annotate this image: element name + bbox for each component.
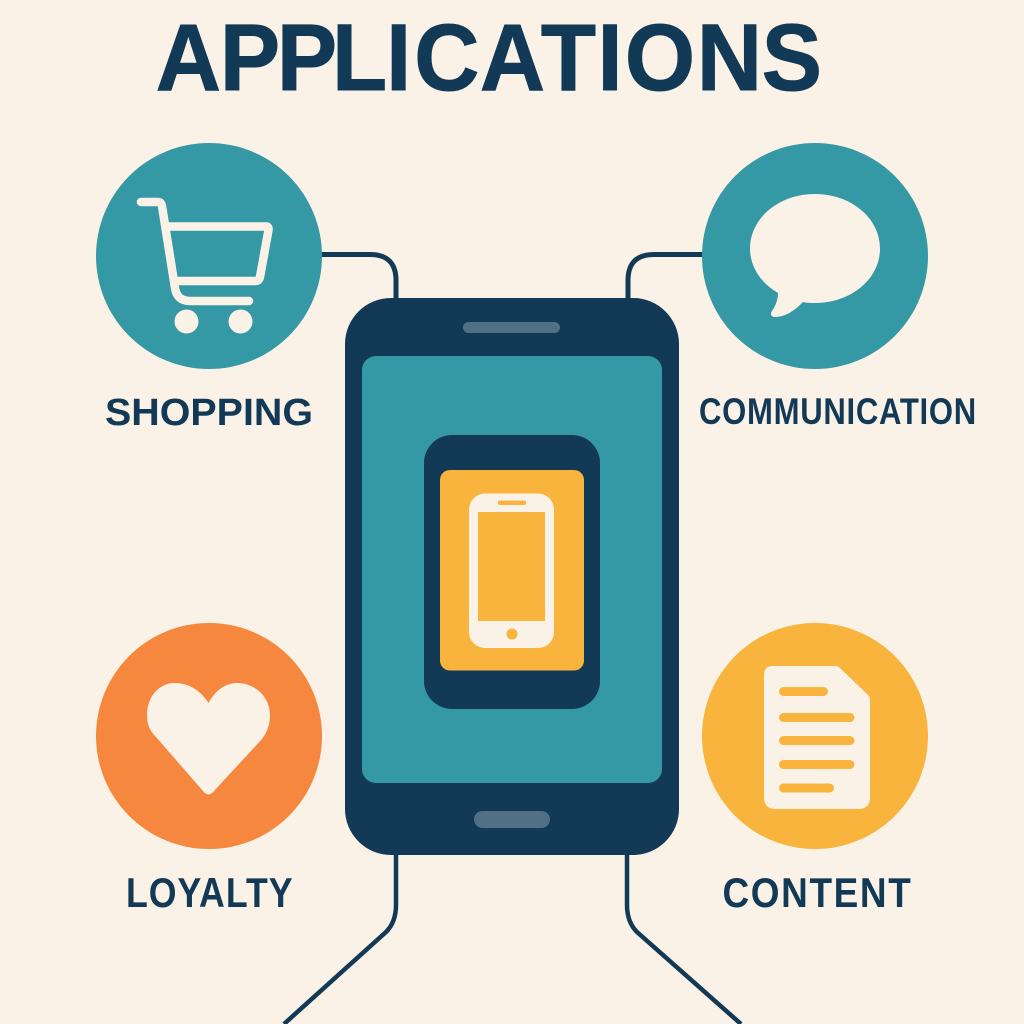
icon: heart: [147, 683, 270, 794]
loyalty label: LOYALTY: [126, 870, 293, 917]
communication label: COMMUNICATION: [699, 392, 976, 433]
connector: content to phone: [627, 852, 741, 1024]
icon: small phone: [469, 494, 554, 648]
shopping circle: [96, 143, 322, 369]
content circle: [702, 623, 928, 849]
shopping label: SHOPPING: [105, 392, 313, 434]
inner yellow screen: [440, 470, 584, 670]
content label: CONTENT: [722, 870, 911, 917]
communication circle: [702, 143, 928, 369]
connector: loyalty to phone: [284, 852, 396, 1024]
panel: content: [702, 623, 928, 917]
phone illustration: [345, 298, 679, 855]
phone body: [345, 298, 679, 855]
inner phone: [424, 435, 600, 709]
panel: communication: [699, 143, 976, 433]
connector: shopping to phone: [320, 254, 396, 300]
title: APPLICATIONS: [156, 4, 822, 111]
panel: shopping: [96, 143, 322, 434]
icon: document: [764, 666, 870, 809]
phone screen: [362, 356, 662, 783]
panel: loyalty: [96, 623, 322, 917]
loyalty circle: [96, 623, 322, 849]
phone home button: [474, 811, 550, 828]
connector: communication to phone: [628, 254, 704, 300]
phone speaker: [463, 322, 560, 333]
icon: shopping cart: [141, 202, 269, 334]
icon: speech bubble: [750, 194, 880, 317]
